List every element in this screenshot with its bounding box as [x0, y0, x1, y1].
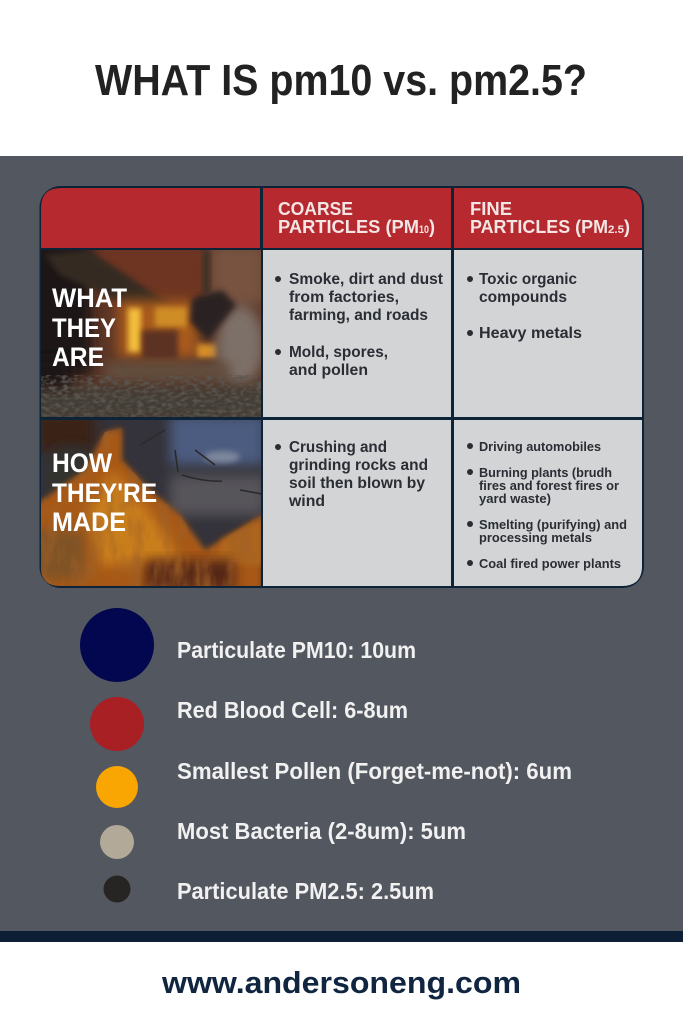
photo: steel furnace with label: ARE: [52, 342, 104, 372]
cell: coarse particles, what they are: [263, 250, 451, 417]
cell: coarse particles, how they're made: grinding rocks and: [289, 457, 428, 474]
cell: coarse particles, how they're made: wind: [288, 493, 325, 510]
cell: fine particles, what they are: compounds: [479, 289, 567, 306]
header cell: fine particles: 2.5: [608, 224, 624, 236]
photo: wildfire with label: HOW: [52, 448, 112, 478]
cell: fine particles, how they're made: Smelting (purifying) and: [479, 518, 627, 532]
legend item: most bacteria: Most Bacteria (2-8um): 5um: [177, 818, 466, 844]
legend item: particulate PM10: [80, 608, 416, 682]
table frame: [40, 186, 644, 588]
cell: coarse particles, what they are: Smoke, dirt and dust: [289, 271, 444, 288]
photo: steel furnace with label: WHAT: [52, 283, 127, 313]
header cell: fine particles: FINE: [470, 199, 512, 219]
cell: fine particles, how they're made: Driving automobiles: [479, 440, 601, 454]
cell: coarse particles, what they are: and pollen: [289, 362, 368, 379]
photo: wildfire with label: THEY'RE: [52, 478, 157, 508]
header cell: fine particles: PARTICLES (PM: [470, 217, 608, 237]
legend item: smallest pollen: [96, 758, 572, 808]
footer website: www.andersoneng.com: [161, 965, 521, 1000]
legend item: red blood cell: Red Blood Cell: 6-8um: [177, 697, 408, 723]
legend item: most bacteria: [100, 818, 466, 859]
panel: comparison table: [30, 186, 644, 590]
cell: coarse particles, how they're made: soil then blown by: [289, 475, 425, 492]
legend: particle sizes: [80, 608, 572, 904]
cell: fine particles, how they're made: Burning plants (brudh: [479, 466, 612, 480]
legend item: smallest pollen: Smallest Pollen (Forget-me-not): 6um: [177, 758, 572, 784]
cell: fine particles, how they're made: yard waste): [479, 492, 551, 506]
header cell: coarse particles: PARTICLES (PM: [278, 217, 419, 237]
header cell: fine particles: ): [624, 217, 630, 237]
cell: coarse particles, what they are: farming, and roads: [289, 307, 428, 324]
legend item: particulate PM2.5: [104, 876, 434, 904]
header cell: fine particles: [454, 188, 642, 248]
legend item: particulate PM2.5: Particulate PM2.5: 2.5um: [177, 878, 434, 904]
photo: wildfire with label: [41, 420, 261, 586]
cell: coarse particles, what they are: Mold, spores,: [289, 344, 388, 361]
header cell: coarse particles: ): [429, 217, 435, 237]
cell: fine particles, what they are: [454, 250, 642, 417]
photo: wildfire with label: MADE: [52, 507, 126, 537]
cell: fine particles, how they're made: Coal fired power plants: [479, 557, 621, 571]
photo: steel furnace with label: THEY: [52, 313, 116, 343]
cell: coarse particles, how they're made: Crushing and: [289, 439, 387, 456]
title: WHAT IS pm10 vs. pm2.5?: [95, 56, 587, 105]
cell: fine particles, what they are: Heavy metals: [479, 325, 582, 342]
cell: coarse particles, how they're made: [263, 420, 451, 586]
cell: fine particles, what they are: Toxic organic: [479, 271, 577, 288]
header cell: coarse particles: [263, 188, 451, 248]
header cell: coarse particles: COARSE: [278, 199, 353, 219]
header cell: coarse particles: 10: [419, 224, 429, 236]
footer bar: [0, 931, 683, 942]
legend item: particulate PM10: Particulate PM10: 10um: [177, 637, 416, 663]
cell: fine particles, how they're made: [454, 420, 642, 586]
cell: fine particles, how they're made: fires and forest fires or: [479, 479, 619, 493]
cell: fine particles, how they're made: processing metals: [479, 531, 592, 545]
photo: steel furnace with label: [41, 250, 261, 417]
cell: coarse particles, what they are: from factories,: [289, 289, 399, 306]
panel: grey background: [0, 156, 683, 931]
legend item: red blood cell: [90, 697, 408, 751]
header cell: empty: [41, 188, 260, 248]
